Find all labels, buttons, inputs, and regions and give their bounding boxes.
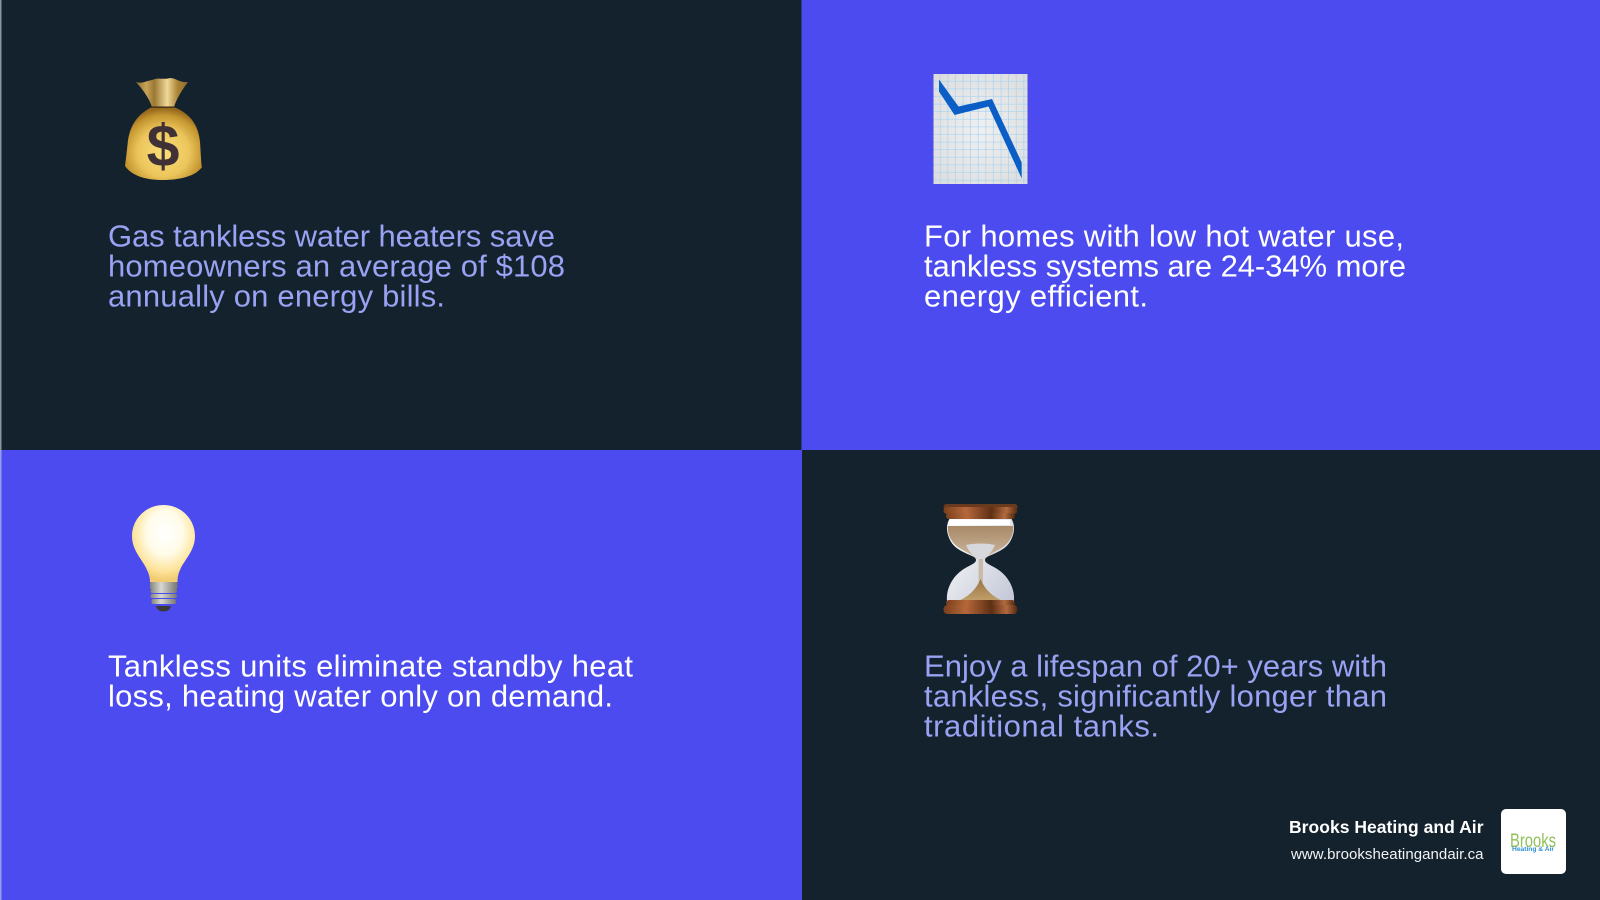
text: savings: Gas tankless water heaters save xyxy=(108,219,555,254)
text: lifespan: tankless, significantly longer than xyxy=(924,679,1387,714)
panel: efficiency xyxy=(802,0,1600,450)
text: standby heat: Tankless units eliminate standby heat xyxy=(108,649,633,684)
icon: declining chart xyxy=(934,74,1028,184)
logo: Brooks xyxy=(1510,831,1556,852)
icon: money bag xyxy=(125,78,202,180)
text: lifespan: traditional tanks. xyxy=(924,709,1159,744)
text: savings: annually on energy bills. xyxy=(108,279,445,314)
text: lifespan: Enjoy a lifespan of 20+ years with xyxy=(924,649,1387,684)
panel: energy savings xyxy=(0,0,802,450)
footer: brand xyxy=(1289,809,1566,874)
logo: Heating & Air xyxy=(1512,847,1555,853)
logo xyxy=(1501,809,1566,874)
text: efficiency: For homes with low hot water use, xyxy=(924,219,1404,254)
panel: lifespan xyxy=(802,450,1600,900)
website: www.brooksheatingandair.ca xyxy=(1290,846,1484,863)
icon: light bulb xyxy=(132,505,195,612)
text: savings: homeowners an average of $108 xyxy=(108,249,565,284)
icon: money bag: $ xyxy=(147,113,179,179)
panel: standby heat xyxy=(0,450,802,900)
text: standby heat: loss, heating water only on demand. xyxy=(108,679,613,714)
text: efficiency: energy efficient. xyxy=(924,279,1148,314)
company name: Brooks Heating and Air xyxy=(1289,817,1484,837)
text: efficiency: tankless systems are 24-34% more xyxy=(924,249,1406,284)
icon: hourglass xyxy=(944,504,1018,614)
